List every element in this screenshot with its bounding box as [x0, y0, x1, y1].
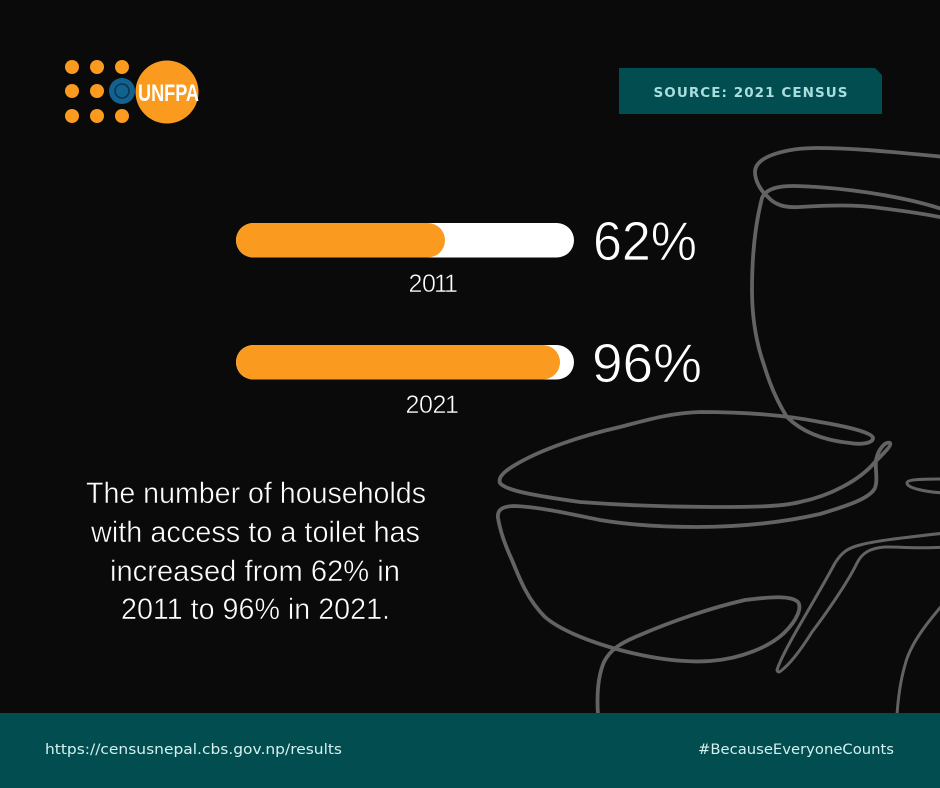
bar chart: 2011: 2011 — [408, 270, 458, 298]
bar chart: 2021: 96% — [592, 332, 702, 394]
bar chart: 2021 — [236, 332, 702, 419]
logo: UNFPA — [65, 60, 199, 124]
body text: 2011 to 96% in 2021. — [121, 593, 390, 626]
hashtag: #BecauseEveryoneCounts — [698, 742, 894, 758]
body text — [86, 477, 426, 626]
source badge — [619, 68, 882, 114]
bar chart: 2011: 62% — [593, 210, 697, 272]
bar chart: 2011 — [236, 210, 697, 298]
body text: with access to a toilet has — [90, 516, 420, 549]
bar chart: 2021: 2021 — [406, 391, 459, 419]
illustration: toilet line drawing — [498, 148, 940, 715]
body text: The number of households — [86, 477, 426, 510]
footer band — [0, 713, 940, 788]
body text: increased from 62% in — [110, 555, 400, 588]
logo: UNFPA: UNFPA — [138, 80, 199, 107]
footer link: https://censusnepal.cbs.gov.np/results — [45, 742, 342, 758]
source badge: SOURCE: 2021 CENSUS — [654, 85, 848, 101]
